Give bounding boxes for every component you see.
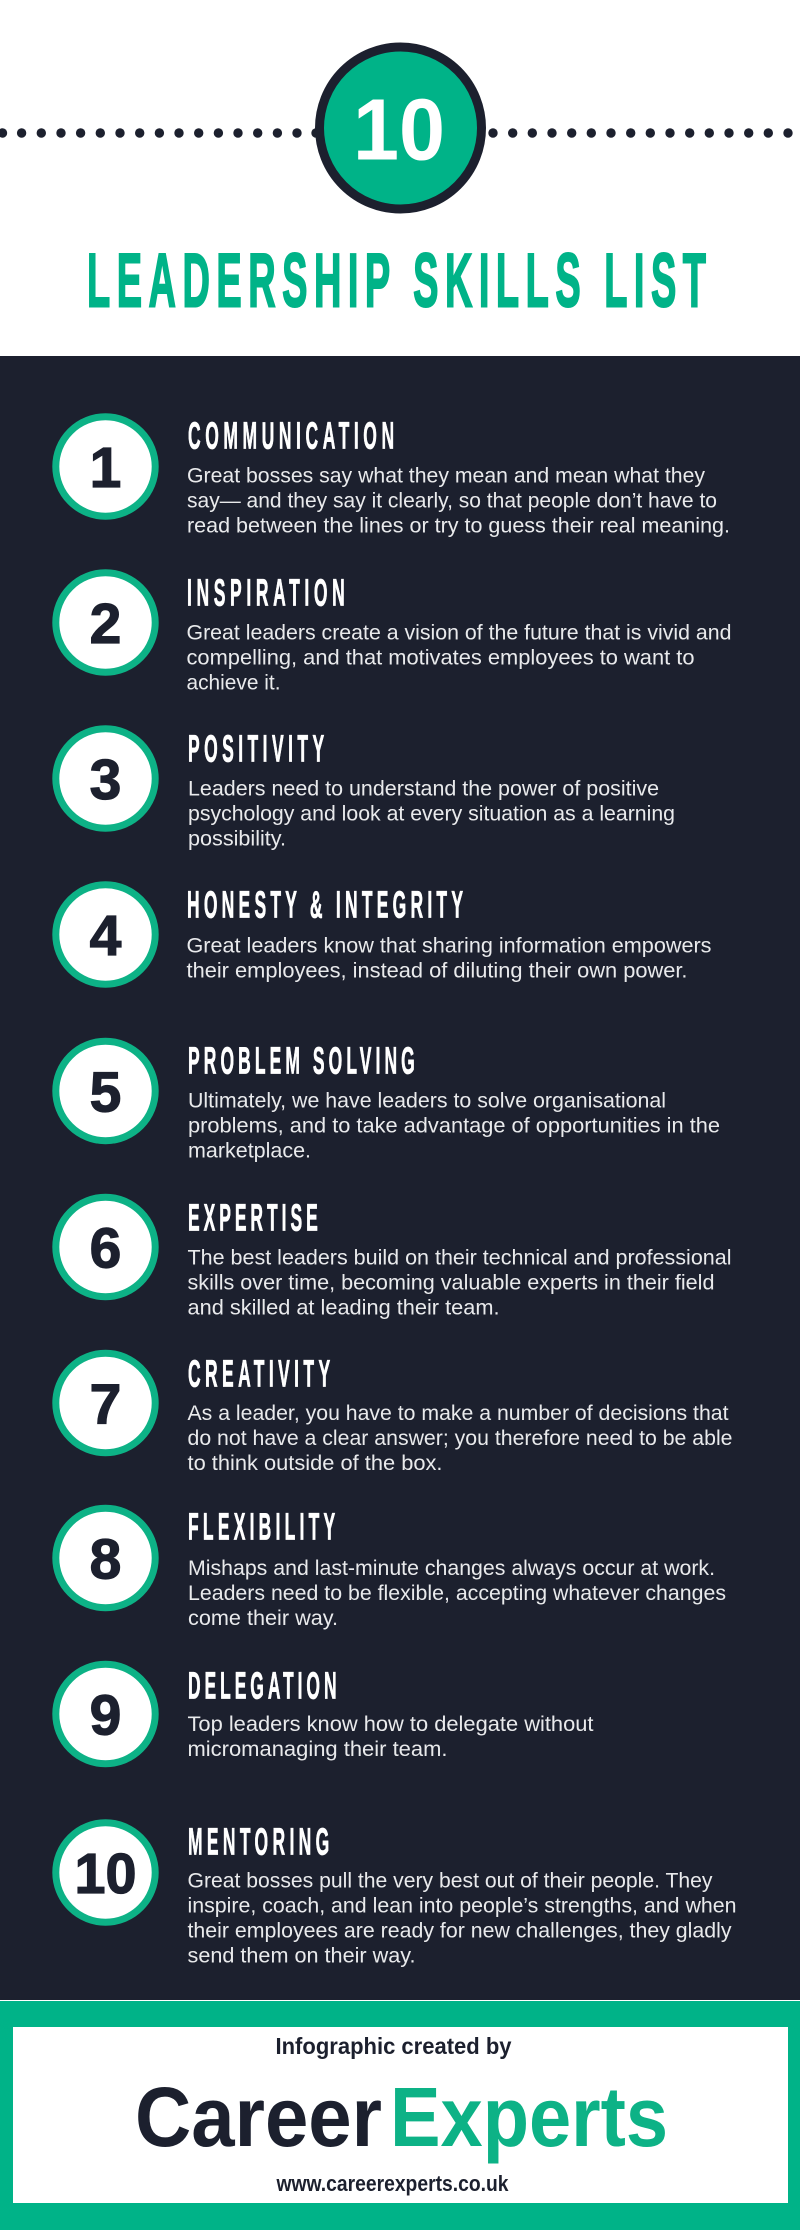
skill 4: HONESTY & INTEGRITY: [187, 884, 463, 927]
skill 5: problems, and to take advantage of opportunities in the: [188, 1114, 720, 1137]
skill 2: compelling, and that motivates employees to want to: [186, 646, 694, 669]
skill 1: 1: [90, 436, 121, 500]
skill 8: Leaders need to be flexible, accepting whatever changes: [188, 1582, 726, 1605]
footer logo box: www.careerexperts.co.uk: [276, 2171, 509, 2196]
footer logo box: [13, 2027, 788, 2203]
skill 6: and skilled at leading their team.: [188, 1296, 500, 1319]
skill 9: [56, 1664, 594, 1764]
skill 4: Great leaders know that sharing information empowers: [186, 934, 712, 957]
skill 9: Top leaders know how to delegate without: [188, 1713, 594, 1736]
skill 8: FLEXIBILITY: [188, 1506, 335, 1549]
skill 6: [56, 1197, 732, 1319]
skill 5: marketplace.: [188, 1139, 311, 1162]
panel: skills list: [0, 356, 800, 2000]
skill 7: As a leader, you have to make a number of decisions that: [188, 1402, 729, 1425]
skill 3: psychology and look at every situation as a learning: [188, 803, 675, 826]
skill 3: Leaders need to understand the power of positive: [188, 778, 659, 801]
skill 2: achieve it.: [186, 671, 280, 694]
skill 10: Great bosses pull the very best out of their people. They: [188, 1869, 713, 1892]
skill 10: inspire, coach, and lean into people’s strengths, and when: [188, 1894, 736, 1917]
skill 4: [56, 884, 712, 984]
title: LEADERSHIP SKILLS LIST: [87, 238, 706, 323]
skill 7: CREATIVITY: [188, 1353, 330, 1396]
skill 1: Great bosses say what they mean and mean what they: [187, 465, 706, 488]
skill 4: their employees, instead of diluting their own power.: [186, 959, 688, 982]
skill 7: [56, 1353, 733, 1475]
skill 6: 6: [90, 1216, 121, 1280]
footer logo box: Career: [135, 2070, 382, 2164]
skill 10: their employees are ready for new challenges, they gladly: [188, 1919, 732, 1942]
skill 5: Ultimately, we have leaders to solve organisational: [188, 1089, 666, 1112]
skill 3: POSITIVITY: [188, 728, 324, 770]
skill 9: DELEGATION: [188, 1665, 337, 1707]
skill 8: 8: [90, 1528, 121, 1592]
skill 1: read between the lines or try to guess their real meaning.: [187, 515, 730, 538]
skill 7: to think outside of the box.: [188, 1452, 442, 1475]
skill 6: EXPERTISE: [188, 1197, 318, 1239]
skill 5: PROBLEM SOLVING: [188, 1040, 415, 1082]
footer logo box: Experts: [390, 2070, 668, 2164]
skill 8: [56, 1506, 726, 1630]
skill 10: MENTORING: [188, 1821, 329, 1864]
skill 5: 5: [90, 1060, 121, 1124]
skill 1: [56, 415, 730, 538]
skill 8: Mishaps and last-minute changes always occur at work.: [188, 1557, 715, 1580]
skill 3: possibility.: [188, 828, 286, 851]
footer logo box: Infographic created by: [276, 2033, 512, 2059]
skill 2: INSPIRATION: [187, 572, 345, 614]
skill 2: [56, 572, 732, 694]
skill 1: COMMUNICATION: [188, 415, 394, 458]
skill 6: skills over time, becoming valuable experts in their field: [188, 1271, 714, 1294]
skill 4: 4: [90, 904, 122, 968]
skill 5: [56, 1040, 720, 1162]
footer band: [0, 2001, 800, 2230]
skill 10: send them on their way.: [188, 1944, 416, 1967]
top number badge: [320, 47, 482, 209]
skill 2: 2: [90, 592, 121, 656]
skill 2: Great leaders create a vision of the future that is vivid and: [186, 621, 732, 644]
top number badge: 10: [353, 82, 445, 178]
skill 9: micromanaging their team.: [188, 1738, 448, 1761]
dotted line: [0, 128, 793, 138]
skill 8: come their way.: [188, 1607, 338, 1630]
skill 7: 7: [90, 1372, 121, 1436]
skill 9: 9: [90, 1684, 121, 1748]
skill 3: 3: [90, 748, 121, 812]
skill 7: do not have a clear answer; you therefore need to be able: [188, 1427, 732, 1450]
skill 6: The best leaders build on their technical and professional: [188, 1246, 732, 1269]
skill 10: [56, 1821, 737, 1967]
skill 10: 10: [74, 1842, 136, 1906]
skill 3: [56, 728, 675, 851]
skill 1: say— and they say it clearly, so that people don’t have to: [187, 490, 717, 513]
